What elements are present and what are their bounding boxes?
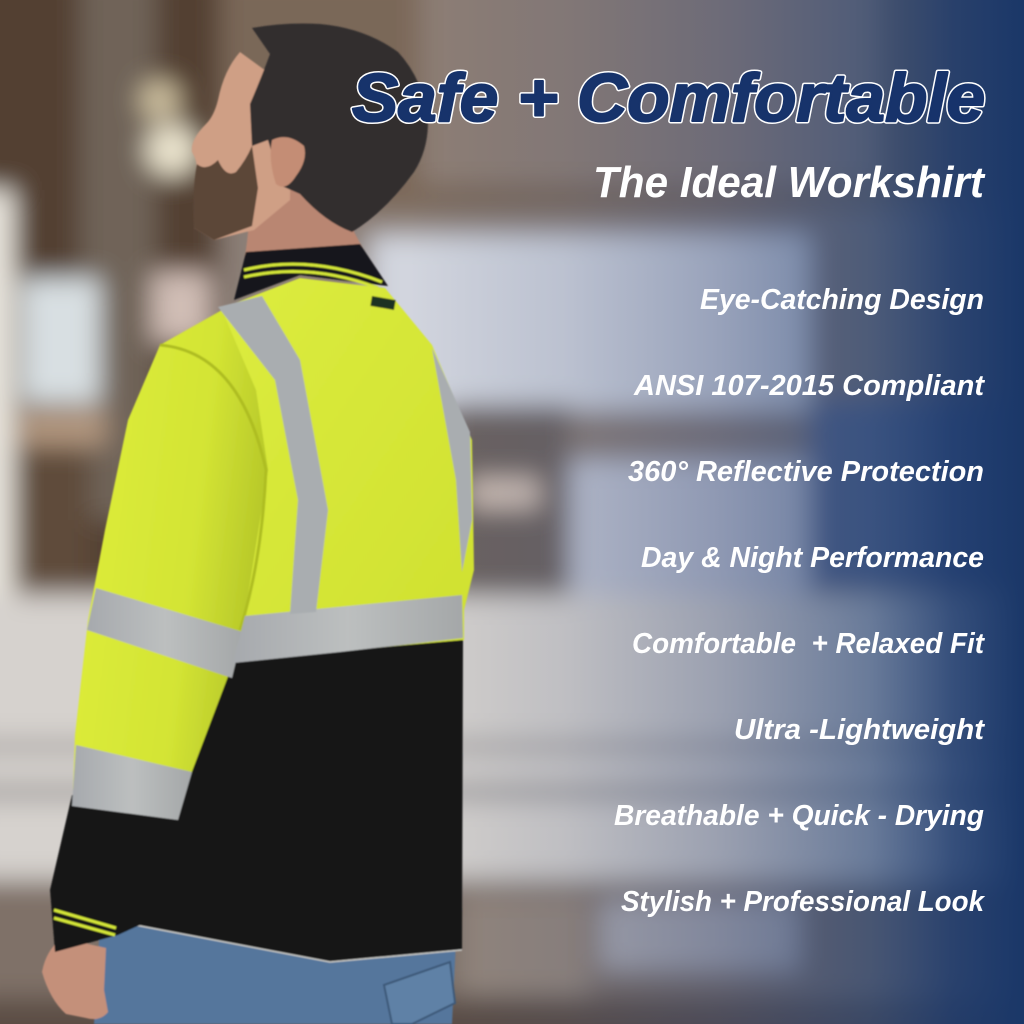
- reflective vertical band left: [218, 296, 328, 614]
- left sleeve yellow: [73, 310, 268, 790]
- reflective band upper arm: [87, 588, 243, 678]
- beard: [193, 146, 258, 240]
- reflective vertical band right: [432, 348, 472, 572]
- feature: reflective protection: 360° Reflective Protection: [628, 456, 984, 488]
- feature: eye-catching design: Eye-Catching Design: [700, 284, 984, 316]
- title: Safe + Comfortable: [352, 60, 985, 136]
- feature: relaxed fit: Comfortable + Relaxed Fit: [632, 628, 985, 660]
- feature list: [614, 284, 986, 918]
- cuff stripes: [54, 910, 116, 935]
- subtitle: The Ideal Workshirt: [593, 158, 986, 207]
- feature: breathable: Breathable + Quick - Drying: [614, 800, 984, 832]
- jeans pocket: [384, 962, 455, 1024]
- collar stripes: [244, 264, 382, 288]
- chest logo tag: [370, 296, 396, 310]
- collar: [234, 244, 388, 300]
- feature: day and night: Day & Night Performance: [641, 542, 984, 574]
- reflective band torso: [233, 595, 463, 663]
- feature: ultra lightweight: Ultra -Lightweight: [734, 714, 985, 746]
- jeans: [94, 925, 456, 1024]
- feature: stylish: Stylish + Professional Look: [621, 886, 986, 918]
- shirt torso yellow: [222, 278, 474, 660]
- shirt torso black: [118, 640, 463, 962]
- shirt hem: [135, 925, 462, 962]
- hand: [42, 938, 108, 1019]
- sleeve black cuff: [50, 795, 180, 952]
- feature: ANSI compliant: ANSI 107-2015 Compliant: [633, 370, 985, 402]
- hair: [250, 24, 428, 232]
- title: Safe + Comfortable: [352, 60, 985, 136]
- man in hi-vis shirt photo: [42, 24, 474, 1024]
- neck: [240, 170, 368, 282]
- reflective band lower arm: [72, 745, 192, 820]
- face: [192, 52, 292, 240]
- sleeve seam: [160, 345, 266, 630]
- ear: [271, 137, 305, 187]
